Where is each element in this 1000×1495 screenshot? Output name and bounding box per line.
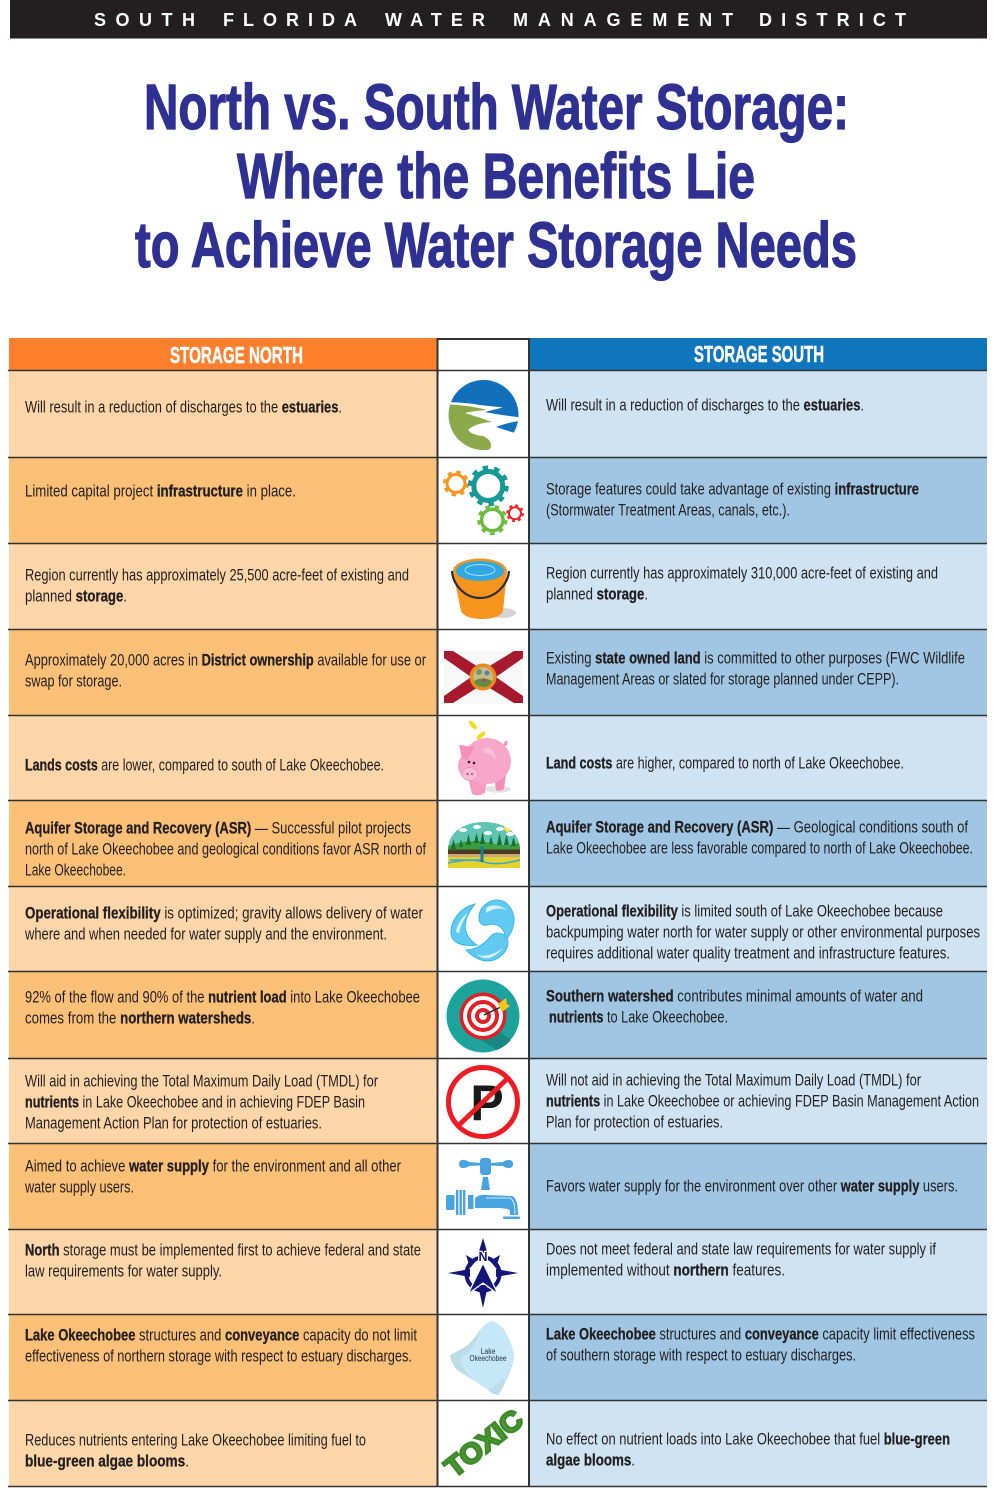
column header: storage north xyxy=(9,338,437,370)
title: Where the Benefits Lie xyxy=(237,140,755,212)
icon: aquifer cross-section xyxy=(448,822,520,868)
column header: storage south xyxy=(530,338,987,370)
panel: north column: Will aid in achieving the Total Maximum Daily Load (TMDL) for xyxy=(25,1072,378,1090)
panel: north column: North storage must be implemented first to achieve federal and state xyxy=(25,1242,421,1260)
panel: north column: Management Action Plan for protection of estuaries. xyxy=(25,1114,322,1132)
icon: bucket xyxy=(452,558,516,619)
icon: Lake Okeechobee map: Okeechobee xyxy=(470,1354,507,1363)
panel: north column: 92% of the flow and 90% of the nutrient load into Lake Okeechobee xyxy=(25,988,420,1006)
icon: water swirl xyxy=(451,900,514,961)
panel: south column: of southern storage with respect to estuary discharges. xyxy=(546,1346,856,1364)
header bar: WATER xyxy=(385,10,485,30)
panel: north column: Lake Okeechobee. xyxy=(25,862,126,880)
panel: north column: Operational flexibility is optimized; gravity allows delivery of water xyxy=(25,904,423,922)
panel: north column: where and when needed for water supply and the environment. xyxy=(24,926,387,944)
panel: north column: Limited capital project infrastructure in place. xyxy=(25,482,296,500)
panel: south column: nutrients to Lake Okeechobee. xyxy=(549,1008,728,1026)
panel: north column: planned storage. xyxy=(25,588,127,606)
panel: south column: Southern watershed contributes minimal amounts of water and xyxy=(546,988,923,1006)
panel: north column: Aimed to achieve water supply for the environment and all other xyxy=(25,1158,401,1176)
icon: Lake Okeechobee map: Lake xyxy=(480,1347,496,1356)
panel: north column: Aquifer Storage and Recovery (ASR) — Successful pilot projects xyxy=(25,820,411,838)
icon: Lake Okeechobee map xyxy=(450,1321,514,1395)
panel: north column: Region currently has approximately 25,500 acre-feet of existing and xyxy=(25,566,409,584)
panel: north column: law requirements for water supply. xyxy=(25,1262,222,1280)
panel: north column: Lands costs are lower, compared to south of Lake Okeechobee. xyxy=(25,756,384,774)
panel: south column: algae blooms. xyxy=(546,1452,635,1470)
panel: south column: (Stormwater Treatment Areas, canals, etc.). xyxy=(546,502,790,520)
panel: south column: Management Areas or slated for storage planned under CEPP). xyxy=(546,670,899,688)
panel: north column: water supply users. xyxy=(24,1178,134,1196)
header bar: SOUTH xyxy=(94,10,195,30)
panel: north column xyxy=(9,371,437,1486)
icon: Florida flag xyxy=(444,651,523,704)
panel: north column: Lake Okeechobee structures and conveyance capacity do not limit xyxy=(25,1326,417,1344)
panel: south column: Storage features could take advantage of existing infrastructure xyxy=(546,480,919,498)
icon: target with arrow xyxy=(446,980,520,1052)
panel: south column: No effect on nutrient loads into Lake Okeechobee that fuel blue-green xyxy=(546,1430,950,1448)
panel: south column: Land costs are higher, compared to north of Lake Okeechobee. xyxy=(546,754,904,772)
header bar xyxy=(10,0,987,39)
header bar: MANAGEMENT xyxy=(513,10,733,30)
icon: north compass xyxy=(448,1238,518,1308)
panel: north column: north of Lake Okeechobee and geological conditions favor ASR north of xyxy=(25,840,426,858)
column header: storage north: STORAGE NORTH xyxy=(170,342,303,368)
icon: toxic text: TOXIC xyxy=(439,1403,529,1483)
panel: north column: blue-green algae blooms. xyxy=(25,1452,189,1470)
panel: north column: Will result in a reduction of discharges to the estuaries. xyxy=(25,398,342,416)
icon: no phosphorus: P xyxy=(470,1075,504,1131)
panel: north column: effectiveness of northern storage with respect to estuary discharges. xyxy=(25,1348,412,1366)
panel: north column: Reduces nutrients entering Lake Okeechobee limiting fuel to xyxy=(25,1432,366,1450)
column header: storage south: STORAGE SOUTH xyxy=(694,341,824,367)
header bar: FLORIDA xyxy=(223,10,357,30)
panel: south column: planned storage. xyxy=(546,586,648,604)
panel: north column: comes from the northern watersheds. xyxy=(25,1010,255,1028)
panel: south column: Plan for protection of estuaries. xyxy=(546,1114,723,1132)
icon: piggy bank xyxy=(458,719,511,795)
panel: south column: Favors water supply for the environment over other water supply users. xyxy=(546,1178,958,1196)
title xyxy=(135,71,857,281)
icon: river estuary xyxy=(448,380,518,450)
panel: north column: swap for storage. xyxy=(25,672,122,690)
panel: north column: nutrients in Lake Okeechobee and in achieving FDEP Basin xyxy=(25,1094,365,1112)
panel: south column xyxy=(530,371,987,1486)
header bar: DISTRICT xyxy=(759,10,906,30)
icon: faucet xyxy=(446,1158,520,1219)
panel: south column: Will result in a reduction of discharges to the estuaries. xyxy=(546,396,864,414)
panel: north column: Approximately 20,000 acres in District ownership available for use or xyxy=(25,652,426,670)
panel: south column: implemented without northern features. xyxy=(546,1262,785,1280)
icon: gears xyxy=(444,468,523,534)
icon: north compass: N xyxy=(478,1250,488,1264)
icon: no phosphorus xyxy=(448,1068,518,1136)
